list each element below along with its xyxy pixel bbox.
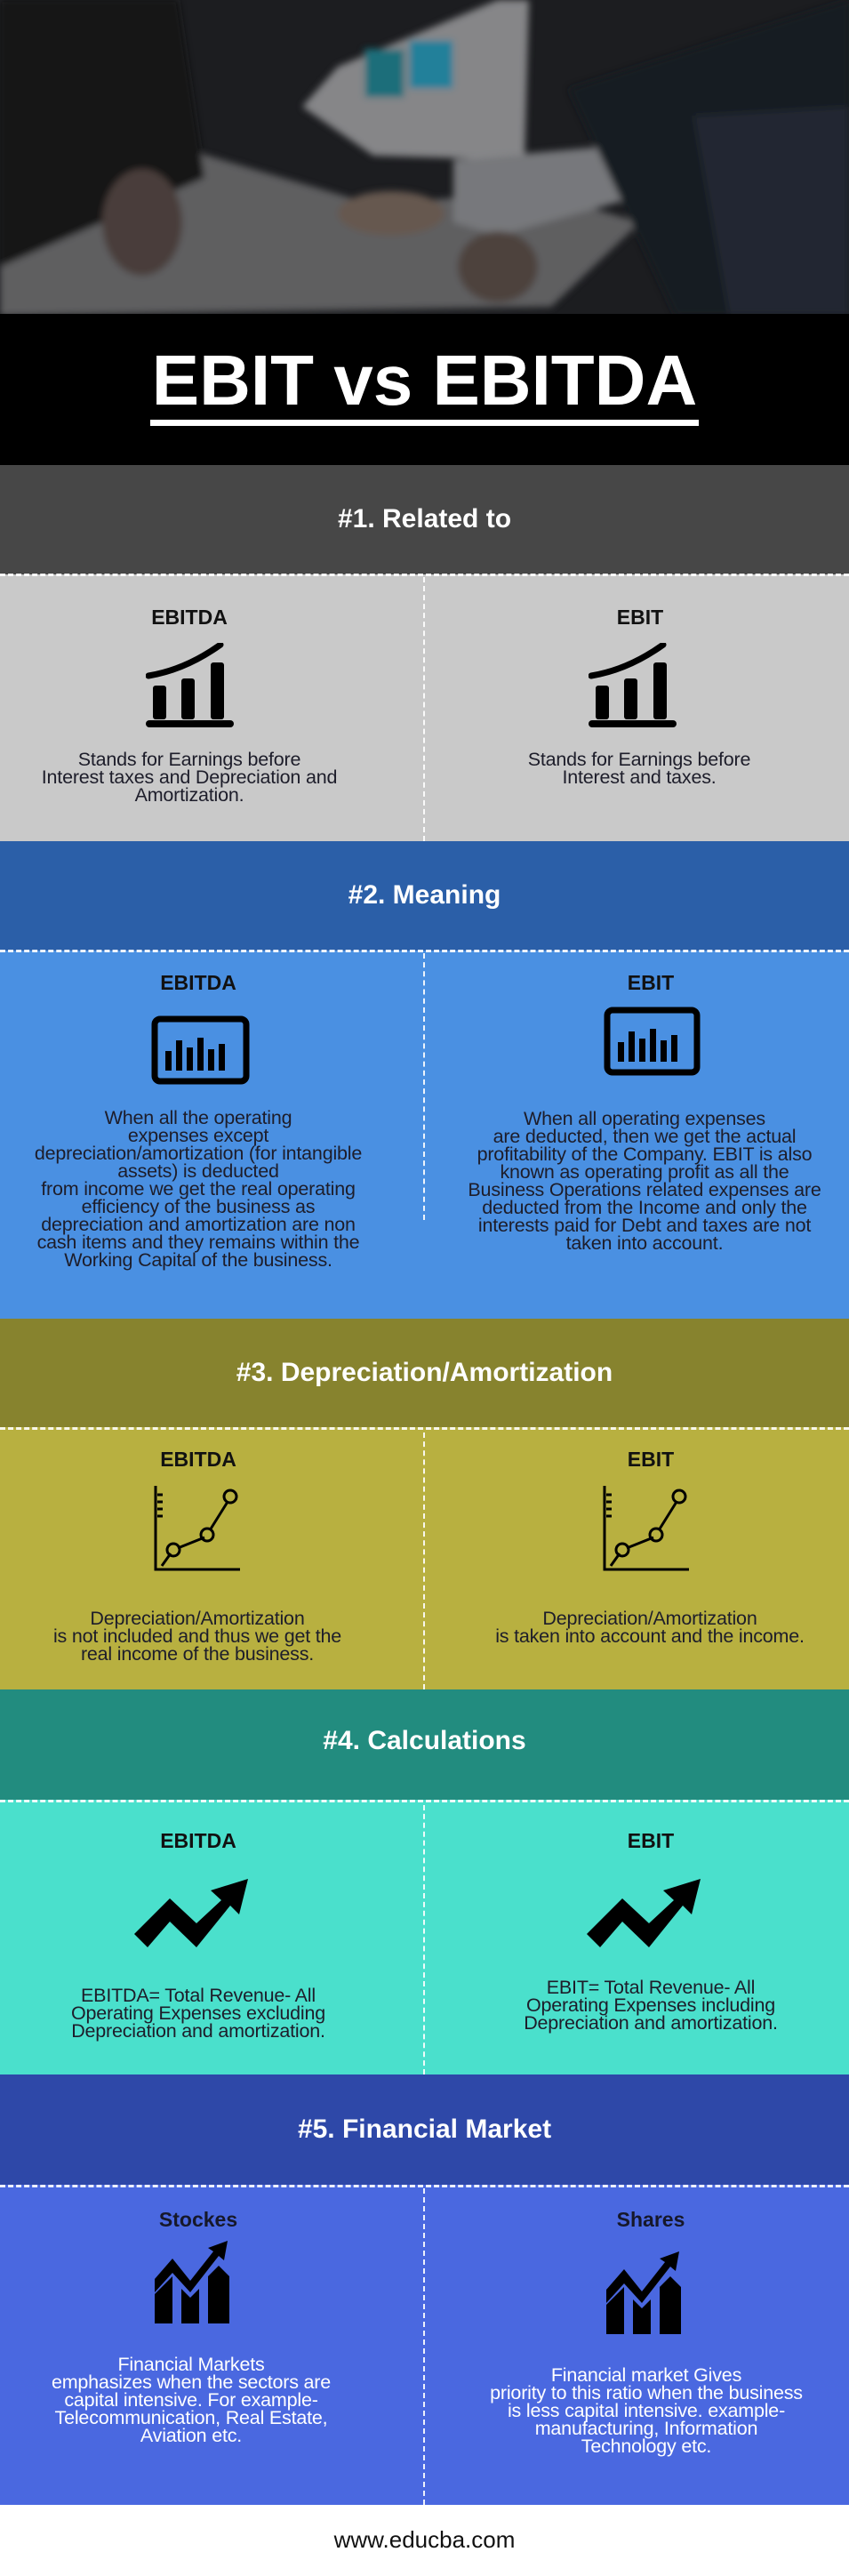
icon: monitor chart xyxy=(605,1007,701,1076)
icon: zigzag arrow xyxy=(134,1879,248,1947)
text: EBIT depreciation: Depreciation/Amortization is taken into account and the income. xyxy=(495,1608,805,1647)
panel: 5 financial market xyxy=(0,2074,849,2505)
panel: 2 meaning xyxy=(0,841,849,1319)
text: EBITDA meaning: When all the operating expenses except depreciation/amortization (for intangible assets) is deducted from income we get the real operating efficiency of the business as depreciation and amortization are non cash items and they remains within the Working Capital of the business. xyxy=(35,1107,362,1271)
panel: 3 depreciation xyxy=(0,1319,849,1689)
EBIT heading: EBIT xyxy=(628,1829,674,1852)
footer: website: www.educba.com xyxy=(334,2526,515,2553)
heading: meaning xyxy=(0,841,849,951)
EBIT heading: EBIT xyxy=(628,1448,674,1471)
title xyxy=(0,314,849,465)
icon: stock chart xyxy=(155,2241,229,2323)
text: Stockes: Financial Markets emphasizes when the sectors are capital intensive. For example- Telecommunication, Real Estate, Aviation etc. xyxy=(52,2354,331,2446)
panel: 4 calculations xyxy=(0,1689,849,2074)
text: EBITDA depreciation: Depreciation/Amortization is not included and thus we get the real income of the business. xyxy=(53,1608,341,1665)
text: EBIT formula: EBIT= Total Revenue- All Operating Expenses including Depreciation and amortization. xyxy=(524,1977,778,2034)
EBITDA heading: EBITDA xyxy=(160,1829,236,1852)
heading: calculations xyxy=(0,1689,849,1800)
icon: line graph xyxy=(603,1486,689,1570)
Shares heading: Shares xyxy=(617,2208,685,2231)
text: EBIT meaning: When all operating expenses are deducted, then we get the actual profitability of the Company. EBIT is also known as operating profit as all the Business Operations related expenses are deducted from the Income and only the interests paid for Debt and taxes are not taken into account. xyxy=(468,1108,821,1254)
Stockes heading: Stockes xyxy=(159,2208,237,2231)
hero photo xyxy=(0,0,849,316)
EBITDA heading: EBITDA xyxy=(151,606,228,629)
icon: monitor chart xyxy=(151,1015,249,1085)
EBIT heading: EBIT xyxy=(617,606,663,629)
text: EBIT related: Stands for Earnings before Interest and taxes. xyxy=(528,749,750,788)
text: EBITDA related: Stands for Earnings before Interest taxes and Depreciation and Amortization. xyxy=(42,749,337,806)
heading: related to xyxy=(0,465,849,574)
text: Shares: Financial market Gives priority to this ratio when the business is less capital intensive. example- manufacturing, Information Technology etc. xyxy=(490,2364,803,2457)
text: EBITDA formula: EBITDA= Total Revenue- All Operating Expenses excluding Depreciation and amortization. xyxy=(71,1985,325,2042)
heading: depreciation: #3. Depreciation/Amortization xyxy=(236,1358,613,1387)
heading: financial market: #5. Financial Market xyxy=(298,2115,551,2144)
title: EBIT vs EBITDA xyxy=(152,341,697,420)
EBIT heading: EBIT xyxy=(628,971,674,994)
heading: depreciation xyxy=(0,1319,849,1427)
EBITDA heading: EBITDA xyxy=(160,971,236,994)
panel: 1 related to xyxy=(0,465,849,841)
icon: growth bars xyxy=(146,643,234,727)
EBITDA heading: EBITDA xyxy=(160,1448,236,1471)
icon: line graph xyxy=(155,1486,240,1570)
heading: meaning: #2. Meaning xyxy=(348,880,501,910)
heading: calculations: #4. Calculations xyxy=(323,1726,526,1755)
icon: growth bars xyxy=(589,643,677,727)
heading: related to: #1. Related to xyxy=(338,504,511,534)
heading: financial market xyxy=(0,2074,849,2185)
icon: zigzag arrow xyxy=(587,1879,701,1947)
icon: stock chart xyxy=(606,2251,681,2334)
